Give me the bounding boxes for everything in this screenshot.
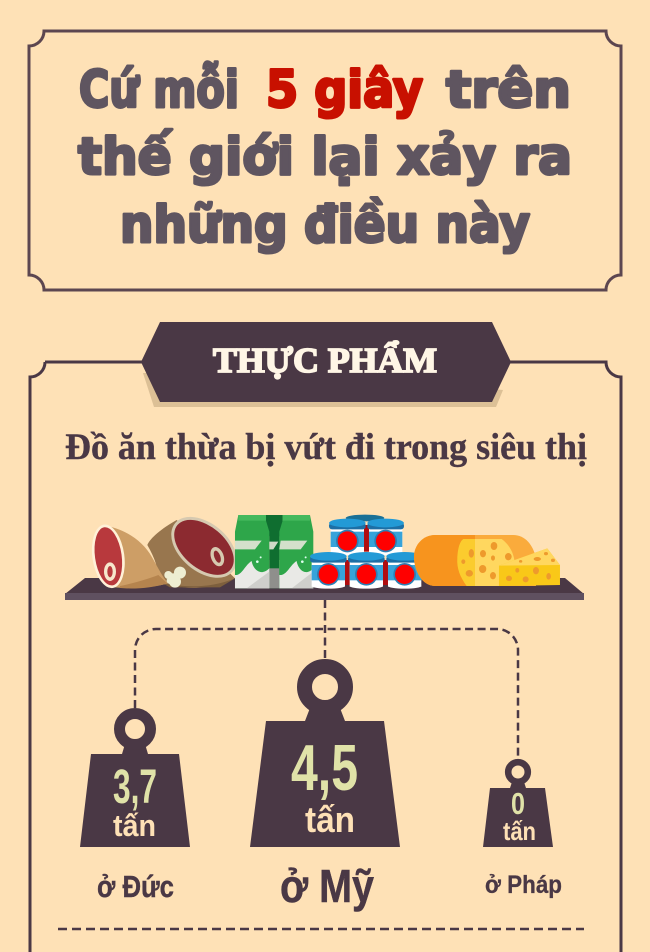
banner heading: THỰC PHẨM xyxy=(213,340,437,380)
subheading: Đồ ăn thừa bị vứt đi trong siêu thị xyxy=(65,427,587,468)
dashed divider xyxy=(58,928,584,930)
can xyxy=(310,552,347,589)
label: France: ở Pháp xyxy=(485,871,562,899)
icon: cheese xyxy=(414,535,560,586)
value: 4,5 xyxy=(291,731,358,804)
title text: Cứ mỗi xyxy=(79,61,239,120)
section banner xyxy=(141,322,511,407)
unit: tấn xyxy=(305,799,355,840)
weight: USA xyxy=(250,666,400,847)
unit: tấn xyxy=(503,816,536,846)
title text: những điều này xyxy=(120,196,530,255)
can xyxy=(329,519,366,555)
title text: 5 giây xyxy=(266,61,423,120)
icon: canned food stack xyxy=(310,515,423,589)
value: 0 xyxy=(511,786,525,821)
can xyxy=(367,519,404,555)
title text xyxy=(78,61,572,255)
icon: hams xyxy=(88,505,248,590)
shelf xyxy=(65,578,584,600)
food section panel outline xyxy=(30,362,621,952)
title text: thế giới lại xảy ra xyxy=(78,128,572,187)
title panel xyxy=(29,31,621,290)
unit: tấn xyxy=(113,808,156,843)
dashed connector lines xyxy=(135,600,518,760)
can xyxy=(386,552,423,589)
weight: Germany xyxy=(80,714,190,847)
label: Germany: ở Đức xyxy=(97,869,174,904)
value: 3,7 xyxy=(113,761,157,814)
icon: milk cartons xyxy=(235,515,313,588)
weight: France xyxy=(483,762,553,847)
can xyxy=(348,552,385,589)
title text: trên xyxy=(446,61,571,120)
label: USA: ở Mỹ xyxy=(280,860,374,912)
